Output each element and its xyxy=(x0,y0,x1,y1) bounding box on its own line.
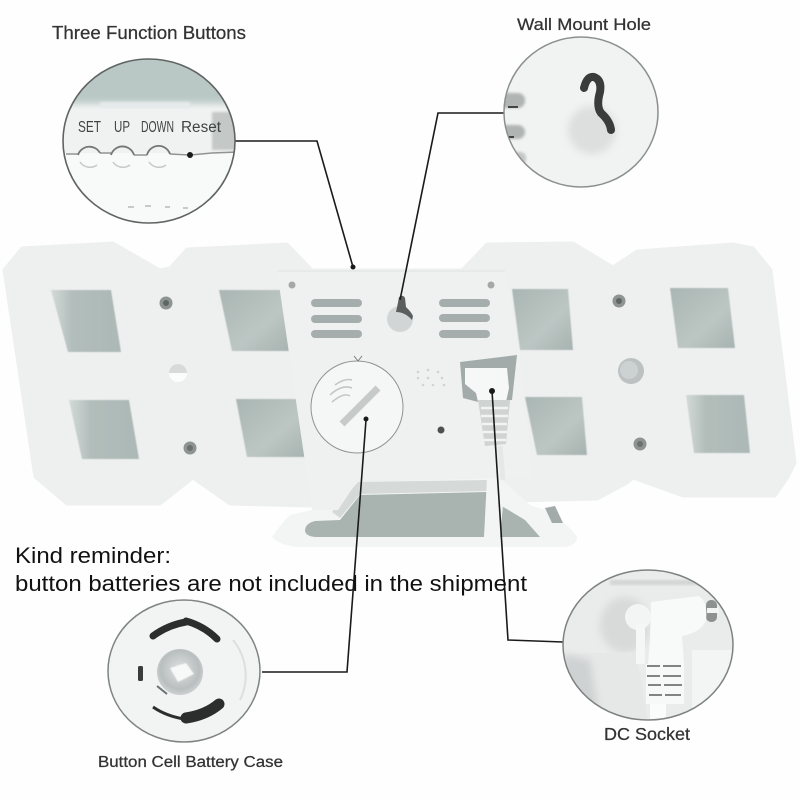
leader line: wall mount hole xyxy=(400,113,505,300)
reset pinhole xyxy=(187,152,193,158)
callout: battery case xyxy=(108,600,260,742)
leader line: battery case xyxy=(262,416,368,672)
lower contact clip xyxy=(153,704,219,719)
reminder note xyxy=(15,543,528,596)
back plate xyxy=(277,271,532,510)
DC plug in socket xyxy=(460,355,517,480)
digit windows xyxy=(51,288,750,459)
centre contact bulb xyxy=(157,649,203,695)
inner ring xyxy=(233,640,246,700)
button label: SET: SET xyxy=(78,119,101,136)
reminder body: button batteries are not included in the shipment xyxy=(15,571,528,596)
battery cover on back plate xyxy=(311,356,403,453)
clock body: front housing xyxy=(4,243,795,506)
centre hole and light sensor xyxy=(169,358,644,384)
callout: DC socket xyxy=(563,570,740,724)
label: DC Socket: DC Socket xyxy=(604,724,690,744)
foot stand xyxy=(272,478,577,547)
label: Wall Mount Hole: Wall Mount Hole xyxy=(517,15,651,34)
reminder heading: Kind reminder: xyxy=(15,543,171,568)
vent slots xyxy=(311,299,490,338)
button label: Reset: Reset xyxy=(181,119,222,136)
callout: wall mount hole xyxy=(498,37,658,187)
screw hole xyxy=(438,426,444,434)
keyhole slot outline xyxy=(584,77,611,130)
label: Three Function Buttons: Three Function Buttons xyxy=(52,23,246,43)
leader line: DC socket xyxy=(489,388,563,642)
clock product photo xyxy=(4,243,795,547)
upper contact clip xyxy=(153,621,217,639)
left contact xyxy=(138,666,143,681)
keyhole mount xyxy=(387,296,413,332)
screws xyxy=(160,294,646,454)
leader line: three function buttons xyxy=(235,141,356,270)
callout: three function buttons xyxy=(62,58,236,224)
button label: UP: UP xyxy=(114,119,130,136)
button label: DOWN: DOWN xyxy=(141,119,174,136)
speaker dots xyxy=(417,369,445,386)
label: Button Cell Battery Case: Button Cell Battery Case xyxy=(98,754,283,771)
